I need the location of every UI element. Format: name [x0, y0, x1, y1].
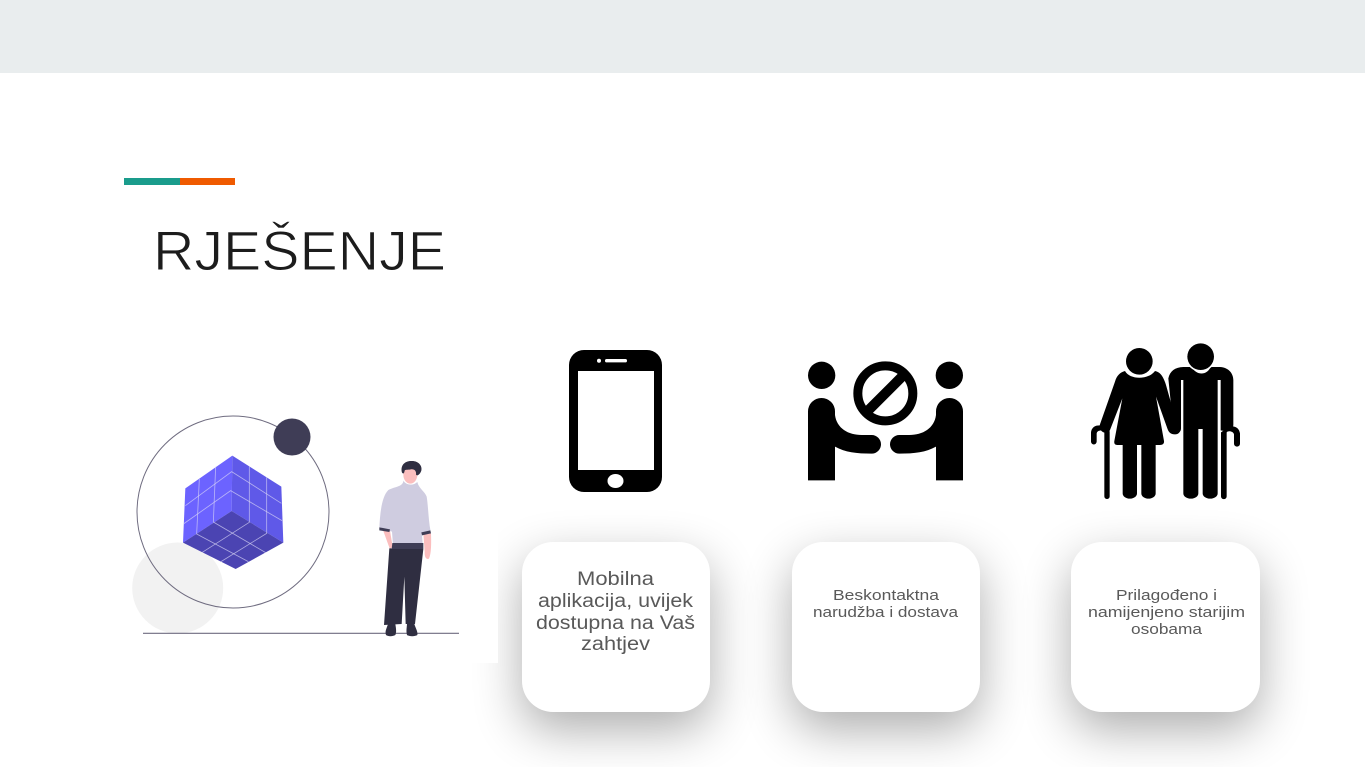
card: mobile app: [522, 542, 710, 712]
standing person: [379, 461, 431, 636]
dark planet: [274, 418, 310, 456]
card: seniors: [1071, 542, 1260, 712]
card: contactless delivery: Beskontaktna: [833, 587, 940, 604]
cube: [183, 456, 283, 569]
card: contactless delivery: narudžba i dostava: [813, 604, 959, 621]
card: contactless delivery: [792, 542, 980, 712]
card: mobile app: aplikacija, uvijek: [538, 591, 694, 612]
top banner: [0, 0, 1365, 73]
card: seniors: namijenjeno starijim: [1088, 604, 1245, 621]
grey circle: [132, 542, 223, 634]
card: mobile app: Mobilna: [577, 569, 654, 590]
card: seniors: Prilagođeno i: [1116, 587, 1217, 604]
card: seniors: osobama: [1131, 621, 1203, 638]
illustration panel: [100, 330, 498, 663]
ground line: [143, 632, 459, 634]
card: mobile app: dostupna na Vaš: [536, 613, 695, 634]
title: RJEŠENJE: [153, 219, 446, 282]
orbit ring: [137, 416, 329, 608]
card: mobile app: zahtjev: [581, 634, 651, 655]
accent bar: [124, 178, 235, 185]
